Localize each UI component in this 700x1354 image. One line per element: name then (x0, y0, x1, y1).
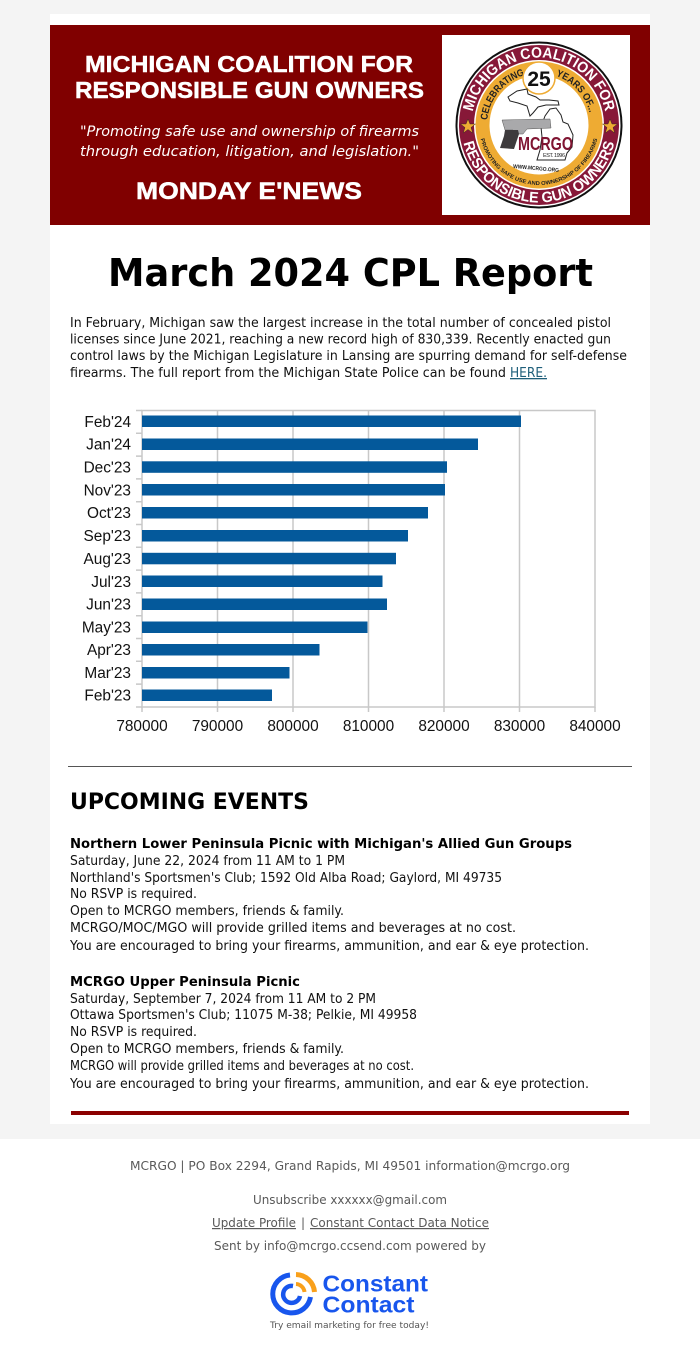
value axis labels: 810000 (343, 718, 394, 735)
logo: MCRGO seal: CELEBRATING (480, 69, 523, 120)
category labels: Aug'23 (84, 551, 131, 568)
event: Northern Lower Peninsula picnic: Saturday, June 22, 2024 from 11 AM to 1 PM (70, 854, 345, 869)
stars (460, 119, 618, 133)
intro paragraph: HERE. (510, 366, 547, 381)
MCRGO wordmark: MCRGO (518, 134, 573, 154)
logo: Constant Contact (269, 1270, 429, 1331)
category labels: Apr'23 (87, 642, 131, 659)
event: Northern Lower Peninsula picnic: Open to MCRGO members, friends & family. (70, 904, 344, 919)
title: March 2024 CPL Report (108, 251, 593, 295)
organization name: RESPONSIBLE GUN OWNERS (75, 77, 424, 103)
category labels: May'23 (82, 620, 131, 636)
logo: MCRGO seal: PROMOTING SAFE USE AND OWNERSHIP OF FIREARMS (480, 138, 598, 185)
footer contact text: Unsubscribe xxxxxx@gmail.com (253, 1193, 447, 1207)
tagline: through education, litigation, and legislation." (80, 144, 419, 160)
category labels: Oct'23 (87, 505, 131, 522)
intro paragraph: control laws by the Michigan Legislature in Lansing are spurring demand for self-defense (70, 349, 627, 364)
logo: MCRGO seal: WWW.MCRGO.ORG (513, 164, 559, 174)
category labels: Sep'23 (84, 528, 131, 545)
intro paragraph: firearms. The full report from the Michigan State Police can be found (70, 366, 506, 381)
value axis labels: 790000 (192, 718, 243, 735)
logo: MCRGO seal: MICHIGAN COALITION FOR (462, 47, 614, 112)
pistol (500, 119, 551, 149)
25 badge (523, 62, 555, 94)
value axis labels: 780000 (116, 718, 168, 735)
footer background (0, 1139, 700, 1354)
value axis labels: 830000 (494, 718, 545, 735)
logo: MCRGO seal (442, 35, 630, 215)
logo: Constant Contact: Try email marketing for free today! (269, 1321, 429, 1331)
event: MCRGO Upper Peninsula picnic: You are encouraged to bring your firearms, ammunition, and ear & eye protection. (69, 1077, 589, 1092)
logo: Constant Contact: Contact (322, 1292, 415, 1318)
event: Northern Lower Peninsula picnic: You are encouraged to bring your firearms, ammunition, and ear & eye protection. (69, 939, 589, 954)
category labels: Nov'23 (84, 482, 131, 500)
main white panel (50, 14, 650, 1124)
tagline: "Promoting safe use and ownership of firearms (80, 124, 420, 140)
organization name (75, 51, 424, 103)
logo: MCRGO seal: RESPONSIBLE GUN OWNERS (464, 140, 614, 203)
value axis labels (116, 718, 621, 735)
event: MCRGO Upper Peninsula picnic: Ottawa Sportsmen's Club; 11075 M-38; Pelkie, MI 49958 (70, 1008, 417, 1023)
logo: MCRGO seal: EST. 1996 (543, 153, 565, 159)
bars (142, 416, 521, 701)
header banner (50, 25, 650, 225)
footer contact text: MCRGO | PO Box 2294, Grand Rapids, MI 49501 information@mcrgo.org (130, 1159, 570, 1173)
footer contact text: | (301, 1216, 305, 1230)
gridlines (136, 410, 595, 712)
value axis labels: 800000 (267, 718, 319, 735)
event: MCRGO Upper Peninsula picnic: Open to MCRGO members, friends & family. (70, 1042, 344, 1057)
event: Northern Lower Peninsula picnic: MCRGO/MOC/MGO will provide grilled items and beverages at no cost. (70, 921, 516, 936)
event: MCRGO Upper Peninsula picnic: Saturday, September 7, 2024 from 11 AM to 2 PM (70, 992, 376, 1007)
category labels: Mar'23 (84, 665, 131, 682)
event: Northern Lower Peninsula picnic (69, 836, 589, 954)
event: MCRGO Upper Peninsula picnic: No RSVP is required. (70, 1025, 197, 1040)
event: Northern Lower Peninsula picnic: Northland's Sportsmen's Club; 1592 Old Alba Road; Gaylord, MI 49735 (70, 871, 502, 886)
intro paragraph: licenses since June 2021, reaching a new record high of 830,339. Recently enacted gun (70, 332, 611, 348)
logo: Constant Contact: Constant (322, 1270, 428, 1296)
bar chart (82, 410, 621, 735)
footer contact text (130, 1159, 570, 1253)
category labels: Jan'24 (86, 436, 131, 454)
value axis labels: 840000 (569, 718, 621, 735)
event: MCRGO Upper Peninsula picnic: MCRGO will provide grilled items and beverages at no cost. (70, 1059, 414, 1074)
event: Northern Lower Peninsula picnic: No RSVP is required. (70, 887, 197, 902)
Michigan outline (508, 89, 573, 160)
category labels: Jul'23 (91, 574, 131, 591)
category labels: Feb'23 (84, 688, 131, 704)
newsletter name: MONDAY E'NEWS (136, 178, 362, 205)
footer contact text: Sent by info@mcrgo.ccsend.com powered by (214, 1239, 486, 1253)
category labels: Dec'23 (84, 460, 131, 476)
category labels: Jun'23 (86, 596, 131, 614)
logo: MCRGO seal: YEARS OF... (558, 69, 594, 112)
category labels (82, 414, 131, 704)
event: MCRGO Upper Peninsula picnic (69, 974, 589, 1092)
footer contact text: Constant Contact Data Notice (310, 1216, 489, 1230)
value axis labels: 820000 (418, 718, 470, 735)
event: Northern Lower Peninsula picnic: Northern Lower Peninsula Picnic with Michigan's Allied Gun Groups (70, 836, 572, 852)
tagline (80, 124, 420, 160)
intro paragraph (70, 316, 627, 381)
footer contact text: Update Profile (212, 1216, 296, 1230)
25 badge: 25 (527, 68, 551, 91)
event: MCRGO Upper Peninsula picnic: MCRGO Upper Peninsula Picnic (70, 974, 300, 990)
category labels: Feb'24 (84, 414, 131, 431)
icon: signal rings (273, 1274, 314, 1313)
organization name: MICHIGAN COALITION FOR (85, 51, 413, 77)
intro paragraph: In February, Michigan saw the largest increase in the total number of concealed pistol (70, 316, 611, 331)
section heading: upcoming events: UPCOMING EVENTS (70, 789, 309, 815)
